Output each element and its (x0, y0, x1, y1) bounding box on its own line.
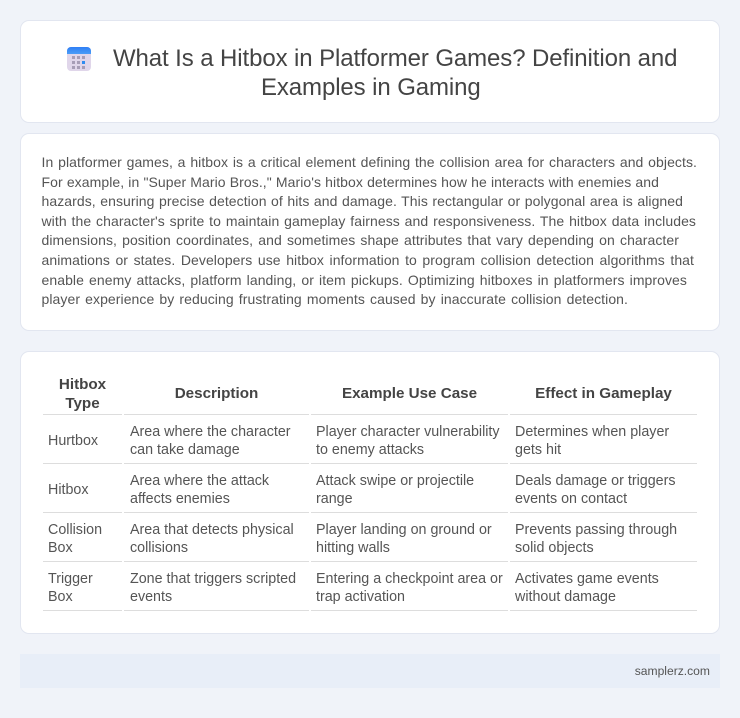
panel: hitbox types table (20, 351, 720, 634)
text block: hitbox definition: with the character's sprite to maintain gameplay fairness and responsiveness. The hitbox data includes (42, 213, 696, 229)
text block: hitbox definition: dimensions, position coordinates, and sometimes shape attributes that vary depending on character (42, 232, 679, 248)
table: hitbox types: Collision (48, 522, 102, 538)
icon: calendar (67, 47, 91, 71)
text block: hitbox definition: player experience by reducing frustrating moments caused by inaccurate collision detection. (42, 291, 628, 307)
text block: hitbox definition (42, 154, 697, 307)
text block: hitbox definition: For example, in "Super Mario Bros.," Mario's hitbox determines how he interacts with enemies and (42, 174, 659, 190)
table: hitbox types: Player character vulnerability (316, 424, 500, 440)
table: hitbox types: can take damage (130, 442, 240, 458)
table: hitbox types: events on contact (515, 491, 627, 507)
table: hitbox types: Activates game events (515, 571, 659, 587)
table: hitbox types: Area where the attack (130, 473, 269, 489)
table: hitbox types: Attack swipe or projectile (316, 473, 474, 489)
panel: intro text (20, 133, 720, 331)
table: hitbox types: Effect in Gameplay (535, 385, 672, 402)
table: hitbox types: Example Use Case (342, 385, 477, 402)
text block: hitbox definition: enable enemy attacks, platform landing, or item pickups. Optimizing hitboxes in platformers improves (42, 272, 687, 288)
table: hitbox types: Hitbox Type (59, 376, 106, 412)
table: hitbox types: range (316, 491, 353, 507)
table: hitbox types: hitting walls (316, 540, 390, 556)
table: hitbox types: Trigger (48, 571, 93, 587)
table: hitbox types: Entering a checkpoint area or (316, 571, 503, 587)
table: hitbox types (43, 376, 697, 611)
table: hitbox types: Prevents passing through (515, 522, 677, 538)
panel: title card (20, 20, 720, 123)
table: hitbox types: Box (48, 589, 73, 605)
table: hitbox types: Area that detects physical (130, 522, 294, 538)
table: hitbox types: Box (48, 540, 73, 556)
table: hitbox types: without damage (515, 589, 616, 605)
footer bar (20, 654, 720, 688)
table: hitbox types: Hurtbox (48, 433, 98, 449)
table: hitbox types: Zone that triggers scripted (130, 571, 296, 587)
table: hitbox types: Player landing on ground or (316, 522, 492, 538)
text block: hitbox definition: animations or states. Developers use hitbox information to program collision detection algorithms that (42, 252, 694, 268)
footer source text: samplerz.com (635, 664, 710, 678)
table: hitbox types: solid objects (515, 540, 594, 556)
table: hitbox types: gets hit (515, 442, 561, 458)
table: hitbox types: Hitbox (48, 482, 89, 498)
table: hitbox types: trap activation (316, 589, 405, 605)
table: hitbox types: affects enemies (130, 491, 230, 507)
table: hitbox types: Description (175, 385, 258, 402)
table: hitbox types: Determines when player (515, 424, 669, 440)
table: hitbox types: Deals damage or triggers (515, 473, 676, 489)
table: hitbox types: events (130, 589, 172, 605)
title: What Is a Hitbox in Platformer Games? Definition and (113, 45, 677, 72)
text block: hitbox definition: hazards, ensuring precise detection of hits and damage. This rectangular or polygonal area is aligned (42, 193, 683, 209)
text block: hitbox definition: In platformer games, a hitbox is a critical element defining the collision area for characters and objects. (42, 154, 697, 170)
table: hitbox types: to enemy attacks (316, 442, 424, 458)
title (113, 45, 677, 101)
table: hitbox types: collisions (130, 540, 188, 556)
table: hitbox types: Area where the character (130, 424, 291, 440)
title: Examples in Gaming (261, 74, 481, 101)
